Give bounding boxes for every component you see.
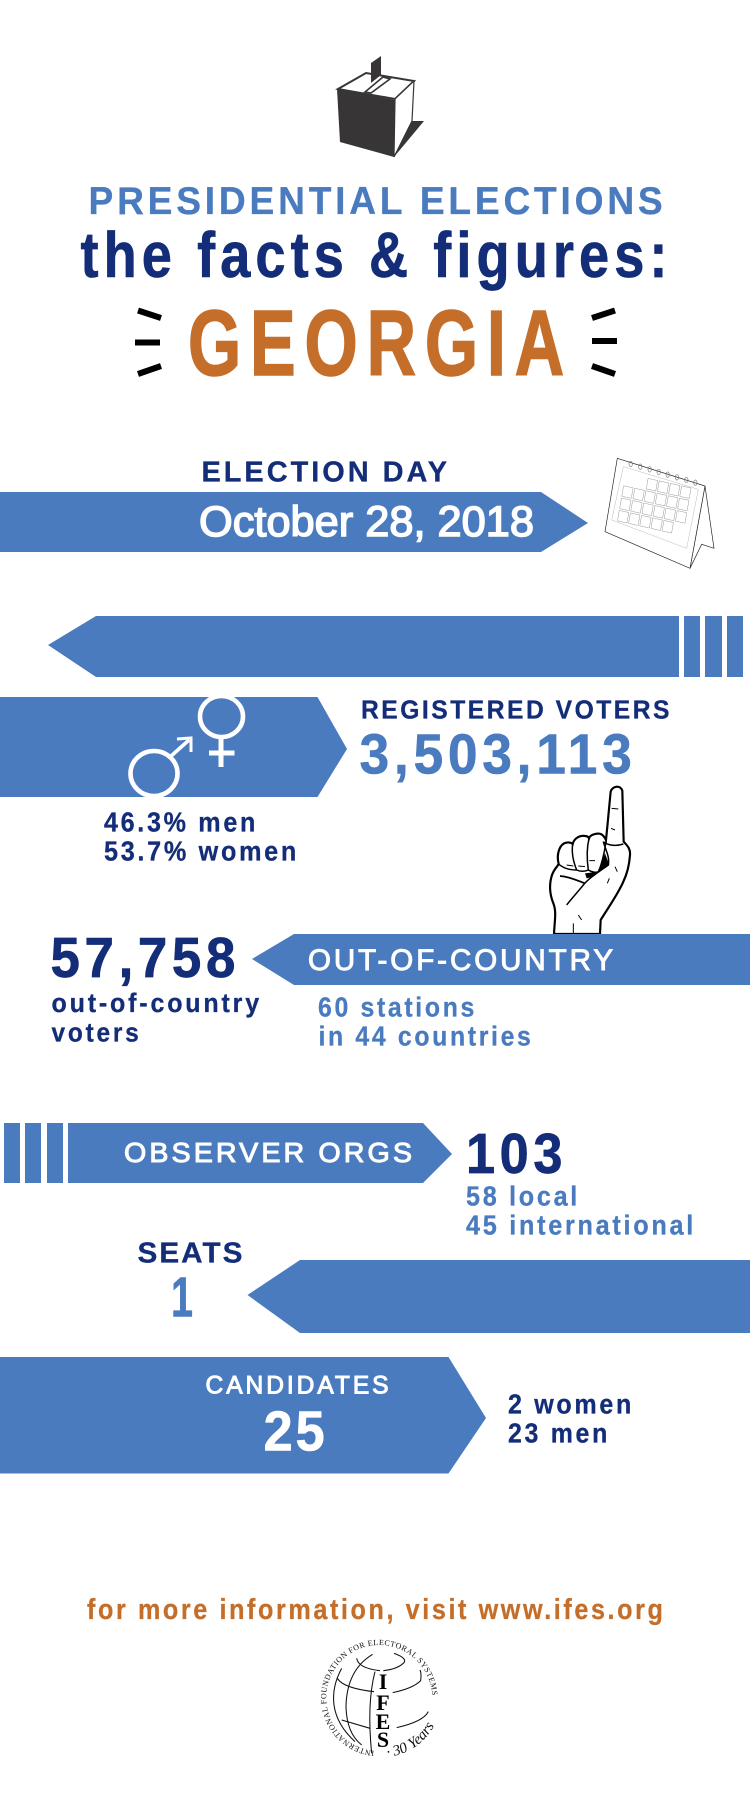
icon: desk calendar: [605, 458, 714, 568]
heading: seats: SEATS: [138, 1238, 244, 1270]
title: presidential elections: PRESIDENTIAL ELECTIONS: [88, 180, 666, 223]
heading: registered voters: REGISTERED VOTERS: [361, 696, 672, 724]
heading: candidates: CANDIDATES: [206, 1372, 392, 1400]
text: out-of-country voters label: voters: [52, 1018, 142, 1048]
arrow bar: candidates: [0, 1357, 486, 1474]
text: local and international observers: [466, 1180, 696, 1240]
heading: election day: ELECTION DAY: [202, 456, 450, 488]
text: voters gender split: 53.7% women: [104, 836, 299, 866]
text: voters gender split: [104, 806, 299, 866]
text: more information: for more information, visit www.ifes.org: [87, 1594, 666, 1626]
logo: IFES globe: F: [376, 1690, 390, 1715]
arrow bar: observer orgs: [4, 1123, 452, 1183]
logo: IFES globe: I: [379, 1669, 387, 1694]
text: candidates gender split: [508, 1388, 634, 1448]
number: candidates: 25: [264, 1400, 328, 1464]
number: registered voters: 3,503,113: [360, 722, 636, 786]
text: out-of-country voters label: [52, 988, 262, 1048]
text: stations and countries: in 44 countries: [318, 1020, 534, 1052]
heading: out-of-country: OUT-OF-COUNTRY: [308, 944, 616, 977]
text: stations and countries: [318, 992, 534, 1052]
icon: raised index finger hand: [550, 787, 630, 934]
text: election date: October 28, 2018: [199, 498, 534, 546]
text: candidates gender split: 23 men: [508, 1418, 610, 1448]
arrow bar: gender split: [0, 697, 347, 797]
logo: IFES globe: · 30 Years ·: [388, 1722, 434, 1756]
text: local and international observers: 45 international: [466, 1210, 696, 1240]
arrow bar: out-of-country: [252, 934, 750, 985]
title: Georgia: GEORGIA: [188, 291, 573, 395]
logo: IFES globe: S: [377, 1727, 389, 1752]
number: observer orgs: 103: [466, 1122, 567, 1186]
arrow bar: seats: [248, 1260, 750, 1333]
number: out-of-country voters: 57,758: [50, 926, 240, 990]
icon: ballot box: [337, 56, 424, 157]
text: local and international observers: 58 local: [466, 1180, 580, 1212]
arrow bar: registered voters top, pointing left with stripes: [48, 616, 743, 677]
text: candidates gender split: 2 women: [508, 1388, 634, 1420]
logo: IFES globe: INTERNATIONAL FOUNDATION FOR ELECTORAL SYSTEMS: [320, 1640, 438, 1756]
icon: female symbol: [200, 696, 243, 767]
text: out-of-country voters label: out-of-country: [52, 988, 262, 1018]
logo: IFES globe: E: [376, 1709, 390, 1734]
heading: observer orgs: OBSERVER ORGS: [124, 1137, 415, 1168]
text: voters gender split: 46.3% men: [104, 806, 258, 838]
icon: male symbol: [130, 738, 191, 796]
number: seats: 1: [171, 1266, 193, 1330]
icon: rays left of Georgia: [135, 310, 161, 374]
icon: rays right of Georgia: [592, 310, 617, 374]
arrow bar: election day: [0, 492, 588, 552]
text: stations and countries: 60 stations: [318, 992, 477, 1022]
